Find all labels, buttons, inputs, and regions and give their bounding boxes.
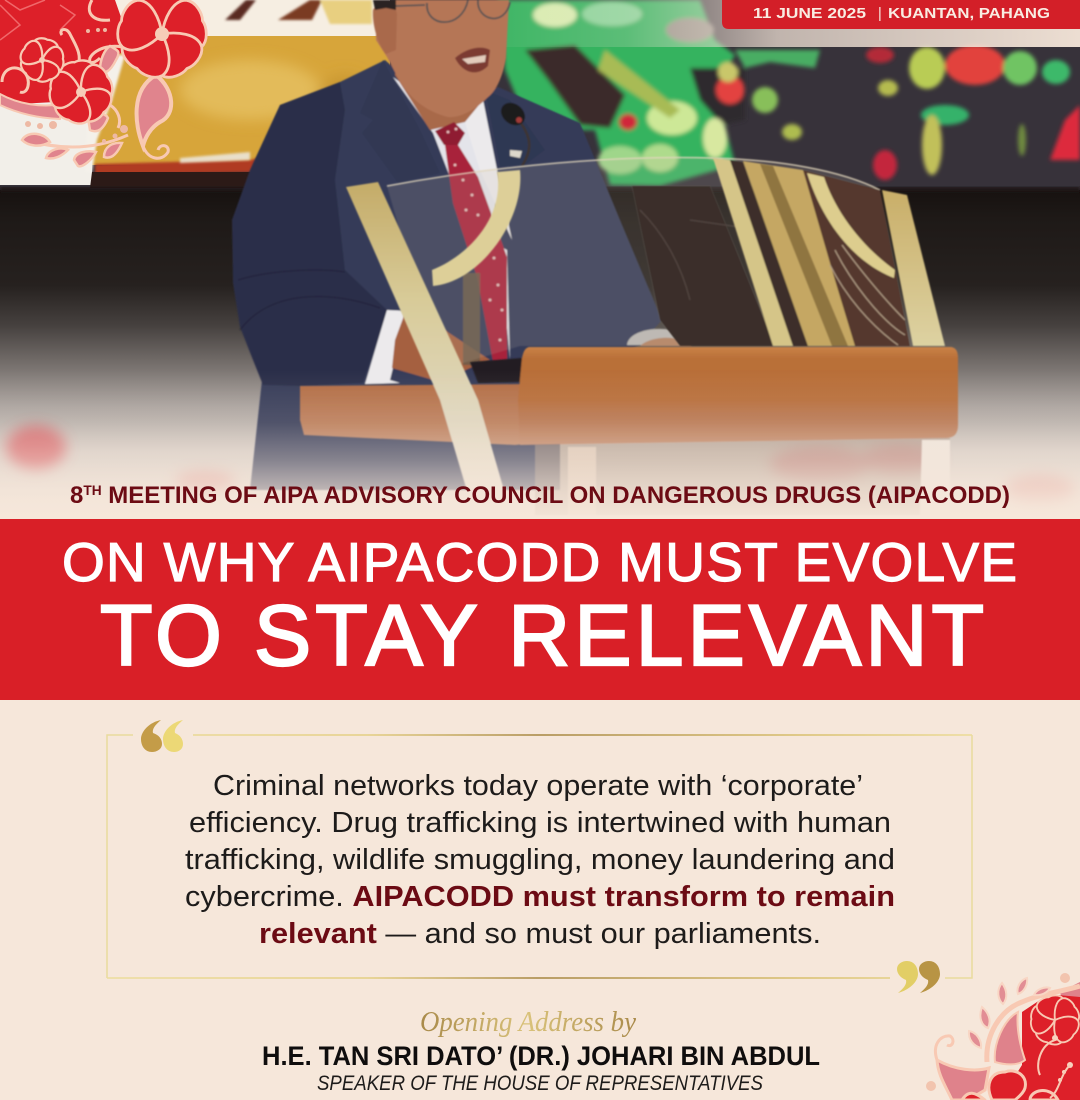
- LED screen: [0, 0, 1080, 192]
- lower hibiscus petals: [962, 1071, 1058, 1100]
- lectern: [300, 157, 958, 518]
- date and location banner: |: [878, 6, 882, 22]
- under lectern shading: [535, 438, 950, 515]
- title band: [0, 519, 1080, 700]
- pink band: [0, 94, 62, 119]
- quote text: [185, 770, 895, 950]
- subtitle: 8: [70, 482, 84, 509]
- sleeve fold lines: [238, 270, 380, 330]
- shirt: [393, 77, 510, 360]
- big hibiscus: [113, 0, 211, 84]
- right shirt part: [465, 100, 512, 240]
- floral ornament: bottom right: [926, 973, 1080, 1100]
- geometric lines: [0, 0, 75, 40]
- glass panel: [387, 157, 913, 370]
- quote text: Criminal networks today operate with ‘corporate’: [213, 770, 863, 802]
- top translucent strip: [0, 0, 1080, 47]
- lapel pin: [510, 150, 522, 158]
- subtitle: MEETING OF AIPA ADVISORY COUNCIL ON DANGEROUS DRUGS (AIPACODD): [102, 482, 1010, 509]
- suit torso: [250, 60, 662, 490]
- blurred red flowers behind the fade: [6, 426, 1075, 504]
- signature line: opening address by: Opening Address by: [420, 1006, 636, 1038]
- watch: [627, 329, 681, 345]
- pink leaf: [137, 75, 171, 146]
- microphone: [497, 98, 529, 166]
- title line 2: TO STAY RELEVANT: [100, 588, 984, 684]
- wooden lectern top: [518, 347, 958, 445]
- speaker: [232, 0, 692, 490]
- subtitle: TH: [83, 482, 102, 498]
- title line 1: ON WHY AIPACODD MUST EVOLVE: [62, 531, 1017, 593]
- hair: [373, 0, 396, 10]
- wooden shelf: [300, 384, 535, 445]
- speaker name: H.E. TAN SRI DATO’ (DR.) JOHARI BIN ABDUL: [262, 1041, 820, 1071]
- speaker title: SPEAKER OF THE HOUSE OF REPRESENTATIVES: [317, 1071, 764, 1095]
- glasses: [396, 0, 510, 22]
- small hibiscus: [12, 33, 71, 90]
- left lapel: [360, 60, 440, 183]
- icon: closing quotation mark: [897, 961, 940, 993]
- dark area behind glass: [632, 186, 775, 346]
- pink top band: [1060, 982, 1080, 1000]
- medium hibiscus: [40, 54, 123, 134]
- green and red screen splashes: [498, 0, 1080, 186]
- date and location banner: KUANTAN, PAHANG: [888, 6, 1050, 22]
- droplets: [969, 978, 1050, 1048]
- neck and head: [395, 45, 483, 130]
- quote text: trafficking, wildlife smuggling, money laundering and: [185, 844, 895, 876]
- date and location banner: [722, 0, 1080, 29]
- lectern legs: [568, 447, 596, 515]
- icon: opening quotation mark: [141, 720, 183, 752]
- pink left leaf: [937, 1060, 989, 1100]
- decorative dots: [1060, 973, 1070, 983]
- photo: speaker at lectern in front of LED screen: [0, 0, 1080, 520]
- date and location banner: 11 JUNE 2025: [753, 6, 866, 22]
- quote text: relevant — and so must our parliaments.: [259, 918, 821, 950]
- left sleeve: [232, 82, 387, 386]
- red corner shape: [0, 0, 128, 105]
- mic stalk: [463, 273, 480, 365]
- hall background below the screen: [0, 185, 1080, 520]
- quote frame: [107, 735, 972, 978]
- tie: [435, 122, 507, 377]
- cream swoosh vine: [987, 986, 1080, 1062]
- pink petals and droplets: [22, 46, 122, 166]
- swirl vines: [2, 0, 130, 147]
- hand: [392, 313, 490, 382]
- left gold strut: [346, 182, 512, 518]
- cuff: [365, 310, 407, 384]
- quote text: efficiency. Drug trafficking is intertwined with human: [189, 807, 891, 839]
- floral ornament: top left: [0, 0, 211, 166]
- pink leaf: [995, 1012, 1025, 1064]
- mouth: [455, 48, 490, 72]
- upper hibiscus: [1021, 985, 1080, 1052]
- stamen stems: [1038, 1040, 1070, 1098]
- gold reflection over tie: [432, 170, 520, 286]
- swirl: [935, 1036, 953, 1060]
- ear: [373, 4, 397, 54]
- quote text: cybercrime. AIPACODD must transform to remain: [185, 881, 895, 913]
- stamens: [1052, 1035, 1073, 1082]
- right lapel: [485, 90, 545, 167]
- right gold strut: [882, 190, 945, 346]
- bottom fade over photo: [0, 370, 1080, 520]
- red mass: [1000, 995, 1080, 1100]
- book and paper: [470, 358, 522, 383]
